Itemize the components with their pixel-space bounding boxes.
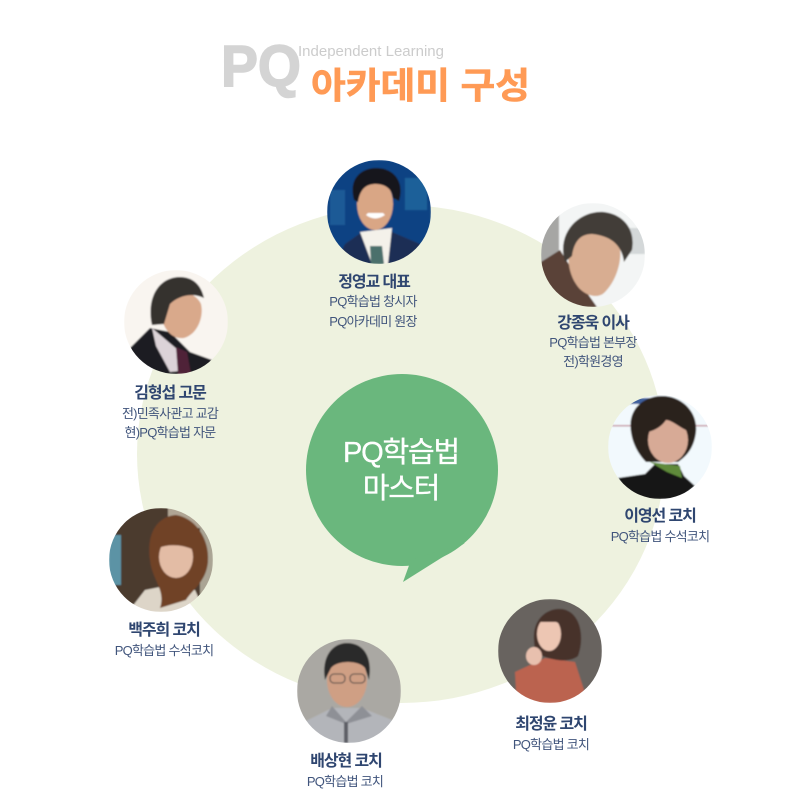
heading: academy composition: 아카데미 구성 [311, 65, 530, 106]
member: Lee Yeong-seon [608, 395, 712, 544]
member: Kang Jong-uk [541, 203, 645, 369]
member: Kim Hyeong-seop: 전)민족사관고 교감 [122, 406, 219, 421]
member: Baek Ju-hee [109, 508, 213, 658]
portrait [498, 599, 602, 703]
member: Kang Jong-uk: PQ학습법 본부장 [549, 335, 637, 350]
center speech bubble [306, 374, 498, 582]
portrait [327, 160, 431, 264]
name and role: 백주희 코치 [128, 621, 200, 639]
name and roles: 김형섭 고문 [134, 384, 207, 402]
name and role: 이영선 코치 [624, 507, 696, 525]
member: Choi Jeong-yoon [498, 599, 602, 752]
member: Kim Hyeong-seop: 현)PQ학습법 자문 [125, 425, 216, 440]
member: Bae Sang-hyeon: PQ학습법 코치 [307, 774, 383, 789]
name and role: 배상현 코치 [310, 752, 382, 770]
bubble text: PQ학습법 [343, 436, 459, 469]
center speech bubble: 마스터 [363, 473, 439, 505]
title [221, 34, 530, 106]
portrait [124, 270, 228, 374]
member: Jeong Yeong-gyo [327, 160, 431, 329]
name and role: 최정윤 코치 [515, 715, 587, 733]
PQ logo letters: PQ [221, 34, 301, 99]
member: Lee Yeong-seon: PQ학습법 수석코치 [611, 529, 709, 544]
subtitle: Independent Learning: Independent Learning [298, 43, 444, 60]
member: Kang Jong-uk: 전)학원경영 [563, 354, 623, 369]
member: Baek Ju-hee: PQ학습법 수석코치 [115, 643, 213, 658]
portrait [541, 203, 645, 307]
member: Jeong Yeong-gyo: PQ아카데미 원장 [329, 314, 417, 329]
name and roles: 정영교 대표 [338, 273, 411, 291]
name and roles: 강종욱 이사 [557, 314, 630, 332]
background circle [137, 205, 665, 703]
portrait [297, 639, 401, 743]
member: Choi Jeong-yoon: PQ학습법 코치 [513, 737, 589, 752]
member: Bae Sang-hyeon [297, 639, 401, 789]
portrait [608, 395, 712, 499]
member: Kim Hyeong-seop [122, 270, 228, 440]
member: Jeong Yeong-gyo: PQ학습법 창시자 [329, 294, 417, 309]
portrait [109, 508, 213, 612]
